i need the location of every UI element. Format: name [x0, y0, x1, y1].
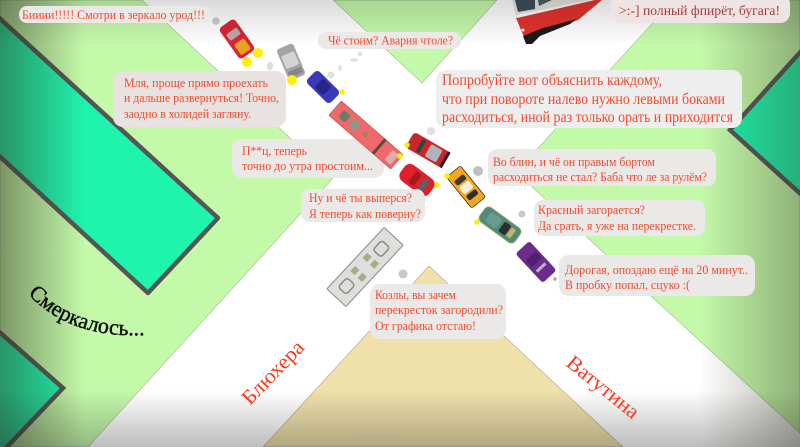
bubble: red light: Красный загорается?	[538, 202, 645, 217]
bubble: why pulled out	[301, 189, 425, 222]
bubble: right side pass: Во блин, и чё он правым бортом	[493, 154, 655, 169]
bubble: tram driver: >:-] полный фпирёт, бугага!	[619, 3, 780, 18]
caption: Смеркалось: Смеркалось...	[30, 286, 144, 336]
vehicle: green car	[477, 205, 523, 245]
lawn: right block	[516, 0, 800, 433]
bubble: why pulled out: Я теперь как поверну?	[309, 206, 421, 221]
bubble: explain left turn: что при повороте налево нужно левыми боками	[442, 91, 725, 108]
vehicle: dark red car	[405, 132, 451, 168]
indicator lights	[242, 48, 480, 225]
building: upper left	[0, 15, 218, 293]
bubble: late call: В пробку попал, сцуко :(	[565, 277, 690, 292]
bubble: red light: Да срать, я уже на перекрестке.	[538, 218, 696, 233]
building: lower left	[0, 329, 63, 447]
vehicle: yellow taxi	[446, 166, 486, 208]
vehicle: grey car	[276, 43, 306, 81]
vehicle: red racing car	[218, 18, 256, 60]
bubble: red light	[534, 200, 705, 236]
bubble: bus driver: От графика отстаю!	[375, 318, 476, 333]
building: right	[730, 48, 800, 197]
bubble: bus driver: перекресток загородили?	[375, 302, 503, 317]
bubble: bus driver	[370, 284, 506, 339]
vehicle: purple car	[515, 241, 557, 283]
bubble: drive straight	[113, 71, 286, 127]
bubble: stuck till morning	[232, 139, 384, 178]
bubble: tram driver	[611, 0, 790, 23]
bubble: honk: Бииии!!!!! Смотри в зеркало урод!!!	[22, 7, 205, 22]
bubble: right side pass: расходиться не стал? Баба что ле за рулём?	[493, 169, 707, 184]
street label: Ватутина: Ватутина	[562, 350, 645, 424]
bubble: drive straight: Мля, проще прямо проехать	[124, 75, 268, 90]
thought bubble dots	[212, 17, 557, 281]
lawn: left block	[0, 0, 333, 447]
bubble: late call	[559, 255, 755, 296]
bubble: drive straight: заодно в холидей загляну.	[124, 106, 251, 121]
vehicle: white bus	[327, 227, 403, 307]
bubble: stuck till morning: точно до утра простоим...	[242, 158, 373, 173]
vehicle: pink bus	[329, 101, 403, 169]
bubble: explain left turn	[436, 70, 742, 128]
bubble: late call: Дорогая, опоздаю ещё на 20 минут..	[565, 262, 748, 277]
bubble: why pulled out: Ну и чё ты выперся?	[309, 190, 412, 205]
vehicle: tram	[512, 0, 602, 44]
bubble: explain left turn: расходиться, иной раз только орать и приходится	[442, 109, 733, 126]
vehicle: bright red car	[397, 161, 437, 199]
bottom edge line	[354, 436, 400, 437]
sand lot: bottom block	[263, 266, 623, 447]
lawn: top block	[333, 0, 497, 83]
bubble: explain left turn: Попробуйте вот объяснить каждому,	[442, 72, 662, 89]
bubble: right side pass	[488, 149, 716, 186]
street label: Блюхера: Блюхера	[236, 335, 310, 409]
bubble: stuck till morning: П**ц, теперь	[242, 143, 307, 158]
bubble: bus driver: Козлы, вы зачем	[375, 287, 456, 302]
vehicle: blue car	[305, 69, 341, 105]
bubble: why are we standing: Чё стоим? Авария чтоле?	[328, 32, 453, 48]
bubble: drive straight: и дальше развернуться! Точно,	[124, 90, 279, 105]
